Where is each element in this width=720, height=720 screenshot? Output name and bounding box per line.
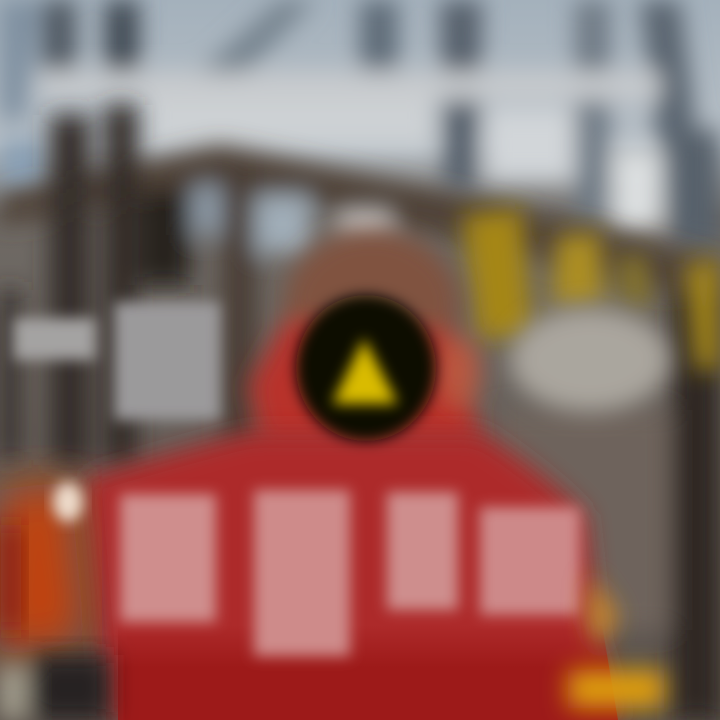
yellow banners xyxy=(462,208,720,370)
pale panels left xyxy=(14,302,220,420)
jacket hem xyxy=(118,625,618,720)
red jacket xyxy=(85,432,622,720)
grey dome xyxy=(510,308,670,412)
reflective panels xyxy=(120,490,580,656)
yellow warning triangle xyxy=(332,338,398,404)
dark lower left object xyxy=(0,655,110,720)
white shoulder highlight xyxy=(53,482,83,522)
hi-vis cuff xyxy=(568,575,664,708)
orange sleeve xyxy=(0,480,85,655)
dark red sleeve fold xyxy=(0,525,22,630)
black warning sign xyxy=(296,295,436,441)
hood and head xyxy=(248,230,480,445)
worker xyxy=(0,230,664,720)
steel girders xyxy=(0,0,720,245)
